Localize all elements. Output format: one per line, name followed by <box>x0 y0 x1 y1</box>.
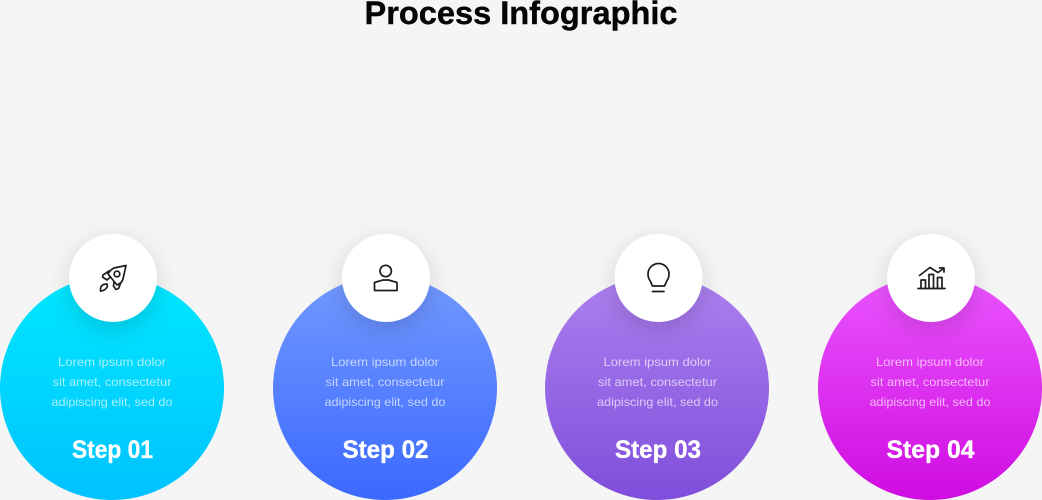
text block: step 01 description <box>52 355 173 409</box>
panel: step 02 <box>273 234 497 500</box>
text block: step 02 description: Lorem ipsum dolor <box>331 355 439 369</box>
text block: step 04 description <box>870 355 991 409</box>
text block: step 01 description: adipiscing elit, sed do <box>52 395 173 409</box>
icon: light bulb <box>648 264 669 292</box>
icon badge: step 01 <box>69 234 157 322</box>
panel: step 04 <box>818 234 1042 500</box>
icon: growth chart <box>918 268 945 288</box>
icon: rocket <box>100 266 126 291</box>
circle: step 01 background <box>0 276 224 500</box>
icon: person <box>374 265 397 290</box>
circle: step 02 background <box>273 276 497 500</box>
icon badge: step 02 <box>342 234 430 322</box>
circle: step 04 background <box>818 276 1042 500</box>
icon badge: step 03 <box>614 234 702 322</box>
text block: step 02 description: adipiscing elit, sed do <box>324 395 446 409</box>
icon badge: step 04 <box>887 234 975 322</box>
text block: step 04 description: sit amet, consectetur <box>870 375 990 389</box>
heading: step 01: Step 01 <box>72 436 153 464</box>
text block: step 04 description: adipiscing elit, sed do <box>870 395 991 409</box>
text block: step 01 description: Lorem ipsum dolor <box>58 355 166 369</box>
text block: step 03 description: adipiscing elit, sed do <box>597 395 718 409</box>
panel: step 03 <box>545 234 769 500</box>
circle: step 03 background <box>545 276 769 500</box>
text block: step 02 description <box>324 355 446 409</box>
panel: step 01 <box>0 234 224 500</box>
text block: step 02 description: sit amet, consectetur <box>326 375 444 389</box>
heading: step 02: Step 02 <box>342 436 428 464</box>
text block: step 03 description: Lorem ipsum dolor <box>604 355 712 369</box>
heading: step 04: Step 04 <box>886 436 975 464</box>
text block: step 03 description: sit amet, consectetur <box>598 375 717 389</box>
text block: step 03 description <box>597 355 718 409</box>
text block: step 04 description: Lorem ipsum dolor <box>876 355 984 369</box>
text block: step 01 description: sit amet, consectetur <box>52 375 172 389</box>
heading: step 03: Step 03 <box>615 436 701 464</box>
